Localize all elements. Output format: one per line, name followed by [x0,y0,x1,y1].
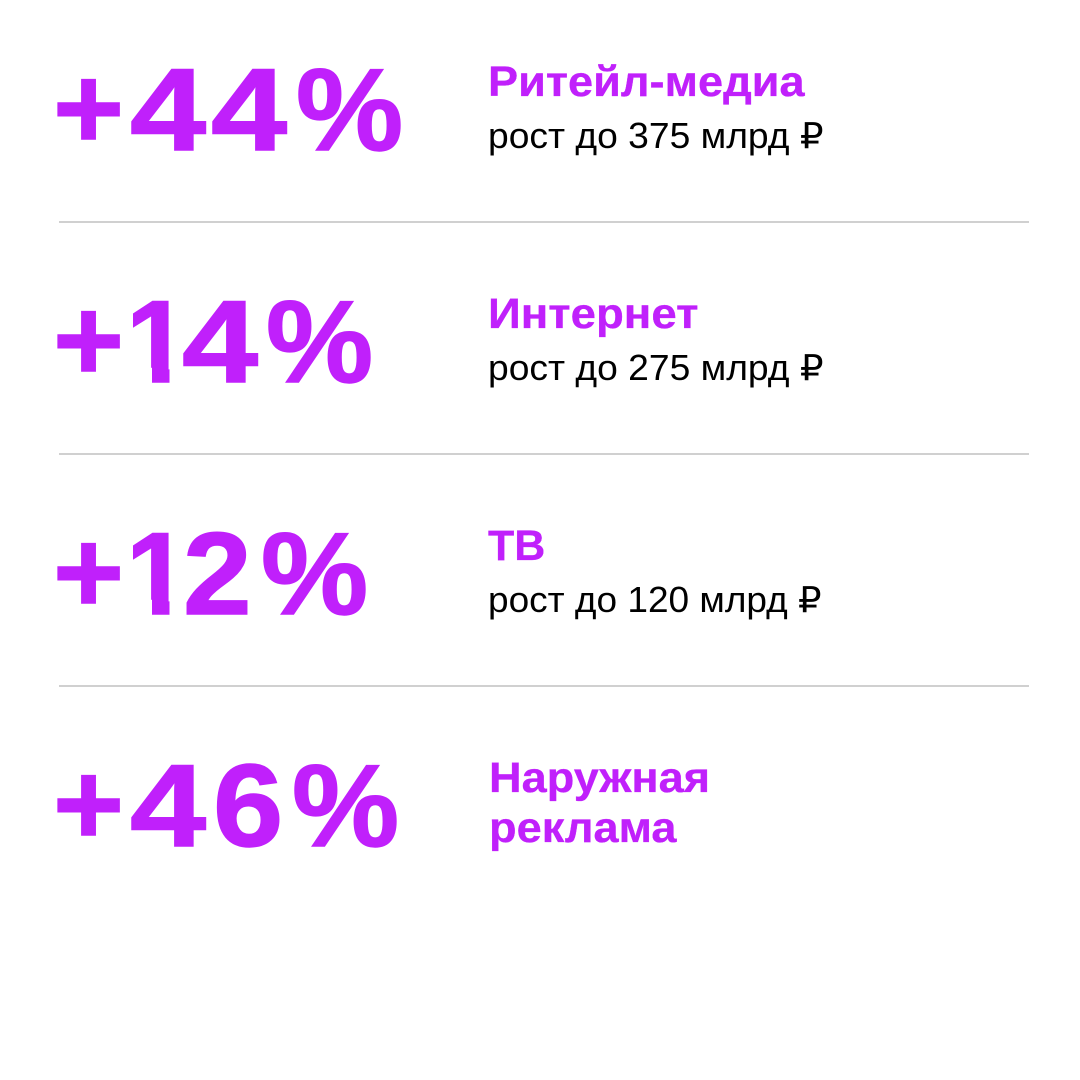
big number +14%: 4 [182,276,258,407]
big number +44%: % [296,44,403,175]
text: growth to 120: рост до 120 млрд ₽ [488,579,822,620]
big number +12%: + [53,506,124,637]
heading: outdoor advertising: Наружная [489,754,710,802]
big number +14%: 1 [124,276,190,407]
row: internet [53,274,824,407]
text: growth to 275: рост до 275 млрд ₽ [488,347,824,388]
row: TV [53,506,822,639]
big number +12%: 2 [182,508,251,639]
heading: outdoor advertising: реклама [489,804,677,852]
big number +44%: 4 [210,44,287,175]
big number +46%: 4 [130,740,206,871]
row: outdoor advertising [53,738,710,871]
row: retail media [53,42,824,175]
big number +12%: % [261,508,368,639]
big number +14%: + [53,274,124,405]
big number +46%: 6 [212,740,283,871]
big number +12% [53,506,368,639]
text: growth to 375: рост до 375 млрд ₽ [488,115,824,156]
big number +46%: + [53,738,124,869]
big number +14%: % [266,276,373,407]
big number +46% [53,738,399,871]
big number +44% [53,42,403,175]
big number +46%: % [292,740,399,871]
big number +44%: 4 [130,44,206,175]
heading: TV: ТВ [488,522,545,570]
big number +12%: 1 [124,508,190,639]
big number +44%: + [53,42,124,173]
heading: retail media: Ритейл-медиа [488,58,805,106]
heading: outdoor advertising [489,754,710,852]
big number +14% [53,274,373,407]
heading: internet: Интернет [488,290,698,338]
